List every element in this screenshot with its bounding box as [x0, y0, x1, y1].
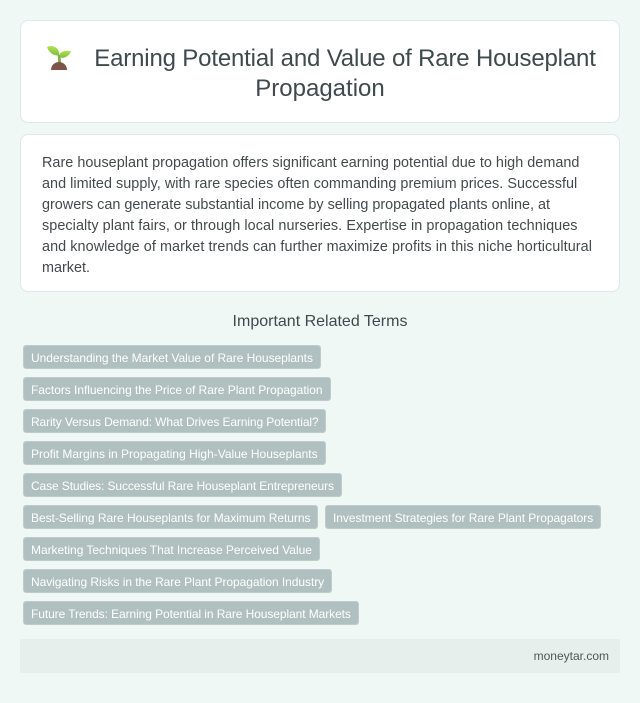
tag 1 [23, 345, 321, 369]
icon: seedling [47, 46, 71, 70]
tag 3 [23, 409, 326, 433]
summary text: specialty plant fairs, or through local nurseries. Expertise in propagation techniques [42, 218, 578, 234]
tag 7 [325, 505, 601, 529]
summary text: Rare houseplant propagation offers significant earning potential due to high demand [42, 155, 579, 171]
tag 10: Future Trends: Earning Potential in Rare Houseplant Markets [31, 607, 351, 621]
title [94, 45, 596, 102]
tag 5: Case Studies: Successful Rare Houseplant Entrepreneurs [31, 479, 334, 493]
tag 9 [23, 569, 332, 593]
tag 8 [23, 537, 320, 561]
footer source: moneytar.com [534, 649, 609, 663]
tag 5 [23, 473, 342, 497]
summary text: and knowledge of market trends can further maximize profits in this niche horticultural [42, 239, 592, 255]
footer [20, 639, 620, 673]
tag 10 [23, 601, 359, 625]
tag 4: Profit Margins in Propagating High-Value Houseplants [31, 447, 318, 461]
tag 6 [23, 505, 318, 529]
summary text: market. [42, 260, 90, 276]
header panel [20, 20, 620, 123]
tag 6: Best-Selling Rare Houseplants for Maximum Returns [31, 511, 310, 525]
tag 7: Investment Strategies for Rare Plant Propagators [333, 511, 593, 525]
tags [23, 345, 601, 625]
tag 3: Rarity Versus Demand: What Drives Earning Potential? [31, 415, 318, 429]
tag 1: Understanding the Market Value of Rare Houseplants [31, 351, 313, 365]
summary text: and limited supply, with rare species often commanding premium prices. Successful [42, 176, 577, 192]
tag 8: Marketing Techniques That Increase Perceived Value [31, 543, 312, 557]
summary text [42, 155, 592, 276]
tag 4 [23, 441, 326, 465]
tag 9: Navigating Risks in the Rare Plant Propagation Industry [31, 575, 324, 589]
tag 2 [23, 377, 331, 401]
title: Earning Potential and Value of Rare Houseplant [94, 45, 596, 72]
summary panel [20, 134, 620, 292]
summary text: growers can generate substantial income by selling propagated plants online, at [42, 197, 550, 213]
tag 2: Factors Influencing the Price of Rare Plant Propagation [31, 383, 323, 397]
title: Propagation [255, 75, 385, 102]
section heading: Important Related Terms [233, 313, 407, 330]
